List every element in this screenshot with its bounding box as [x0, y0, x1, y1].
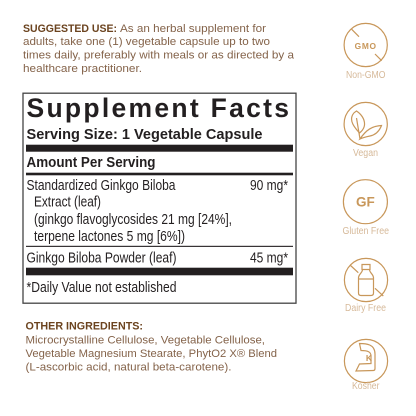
icon: non-GMO — [344, 23, 387, 81]
text block: suggested use: As an herbal supplement for — [120, 23, 267, 35]
row: standardized ginkgo biloba extract: 90 mg* — [250, 178, 288, 194]
row: standardized ginkgo biloba extract: (ginkgo flavoglycosides 21 mg [24%], — [34, 212, 232, 228]
label: dairy free: Dairy Free — [345, 303, 386, 314]
row: ginkgo biloba powder — [26, 251, 288, 267]
label: non-GMO: Non-GMO — [346, 70, 386, 81]
row: ginkgo biloba powder: Ginkgo Biloba Powder (leaf) — [26, 251, 176, 267]
label: gluten free: Gluten Free — [342, 226, 389, 237]
text block: suggested use — [23, 23, 294, 75]
icon: kosher — [344, 339, 388, 392]
panel: supplement facts — [23, 93, 296, 303]
text block: other ingredients: Vegetable Magnesium Stearate, PhytO2 X® Blend — [26, 348, 277, 360]
amount per serving: Amount Per Serving — [26, 155, 156, 171]
row: standardized ginkgo biloba extract — [26, 178, 288, 245]
text block: other ingredients: OTHER INGREDIENTS: — [26, 321, 143, 333]
text block: suggested use: SUGGESTED USE: — [23, 23, 117, 35]
label: kosher: Kosher — [352, 381, 380, 392]
thin divider — [26, 246, 293, 247]
text block: other ingredients: Microcrystalline Cellulose, Vegetable Cellulose, — [26, 334, 265, 346]
text block: suggested use: adults, take one (1) vegetable capsule up to two — [23, 36, 270, 48]
thick divider — [26, 145, 293, 152]
heading: supplement facts: Supplement Facts — [26, 93, 289, 123]
row: standardized ginkgo biloba extract: Extract (leaf) — [34, 195, 101, 211]
icon: gluten free: GF — [356, 194, 375, 210]
row: standardized ginkgo biloba extract: Standardized Ginkgo Biloba — [26, 178, 176, 194]
icon: non-GMO: GMO — [355, 41, 377, 51]
icon: dairy free — [344, 258, 388, 314]
thick divider — [26, 268, 293, 275]
row: standardized ginkgo biloba extract: terpene lactones 5 mg [6%]) — [34, 229, 185, 245]
text block: suggested use: healthcare practitioner. — [23, 63, 142, 75]
footnote: *Daily Value not established — [26, 280, 176, 296]
icon: vegan — [344, 102, 387, 159]
serving size: Serving Size: 1 Vegetable Capsule — [26, 126, 262, 143]
medium divider — [26, 173, 293, 175]
text block: other ingredients: (L-ascorbic acid, natural beta-carotene). — [26, 361, 231, 373]
label: vegan: Vegan — [353, 148, 378, 159]
icon: gluten free — [342, 180, 389, 237]
row: ginkgo biloba powder: 45 mg* — [250, 251, 288, 267]
text block: suggested use: times daily, preferably with meals or as directed by a — [23, 50, 294, 62]
icon: kosher: K — [366, 353, 373, 363]
text block: other ingredients — [26, 321, 277, 373]
